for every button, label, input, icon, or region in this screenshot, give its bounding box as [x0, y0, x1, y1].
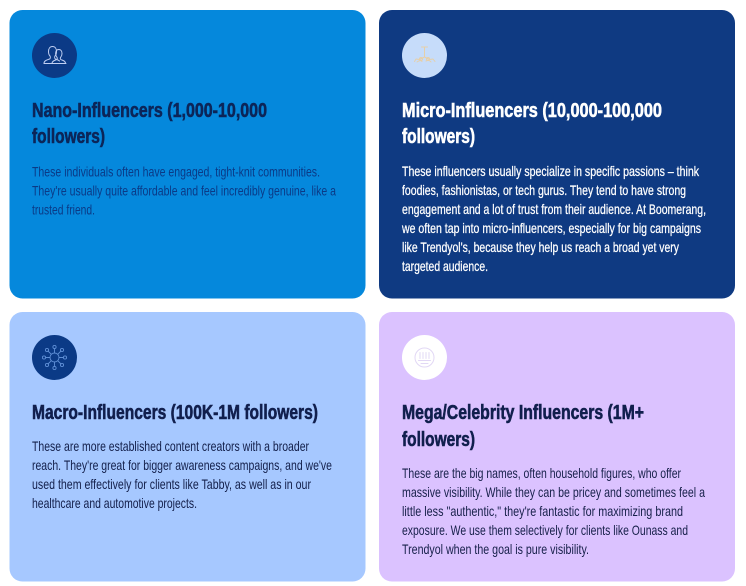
heading: nano: Nano-Influencers (1,000-10,000 — [32, 100, 267, 122]
heading: macro: Macro-Influencers (100K-1M followers) — [32, 402, 318, 424]
body text: micro — [401, 164, 706, 274]
body text: mega: little less "authentic," they're fantastic for maximizing brand — [402, 504, 683, 519]
panel: nano-influencers — [10, 10, 366, 298]
body text: macro: healthcare and automotive projects. — [32, 496, 197, 511]
body text: macro: reach. They're great for bigger awareness campaigns, and we've — [32, 458, 332, 473]
heading: nano — [32, 100, 267, 148]
panel: mega/celebrity influencers — [379, 312, 735, 582]
panel background: nano — [10, 10, 366, 298]
heading: mega: Mega/Celebrity Influencers (1M+ — [402, 402, 644, 424]
heading: mega: followers) — [402, 429, 475, 451]
body text: nano: These individuals often have engaged, tight-knit communities. — [32, 164, 320, 180]
panel background: micro — [379, 10, 735, 298]
heading: mega — [402, 402, 644, 451]
body text: macro: used them effectively for clients like Tabby, as well as in our — [32, 477, 311, 492]
body text: mega — [402, 466, 705, 557]
panel background: mega — [379, 312, 735, 582]
heading: micro: Micro-Influencers (10,000-100,000 — [402, 100, 662, 122]
icon: badge with figures — [402, 335, 447, 380]
body text: nano — [32, 164, 336, 218]
body text: mega: Trendyol when the goal is pure visibility. — [402, 542, 589, 557]
icon: branching network — [402, 33, 447, 78]
icon: two people — [32, 33, 77, 78]
heading: micro — [402, 100, 662, 148]
body text: nano: They're usually quite affordable and feel incredibly genuine, like a — [32, 184, 336, 198]
panel: macro-influencers — [10, 312, 366, 582]
heading: nano: followers) — [32, 126, 105, 148]
body text: micro: targeted audience. — [402, 259, 488, 274]
body text: nano: trusted friend. — [32, 202, 95, 218]
icon: network hub — [32, 335, 77, 380]
body text: macro: These are more established content creators with a broader — [32, 439, 309, 454]
panel: micro-influencers — [379, 10, 735, 298]
body text: macro — [32, 439, 332, 511]
panel background: macro — [10, 312, 366, 582]
heading: micro: followers) — [402, 126, 475, 148]
